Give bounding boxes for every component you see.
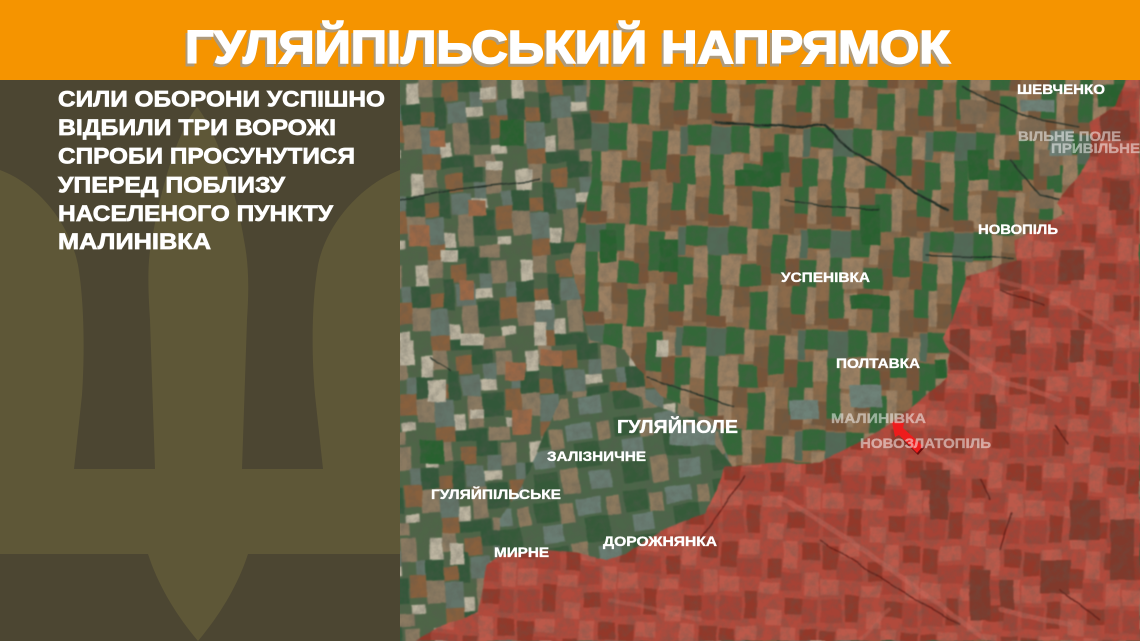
map labels: settlements: ГУЛЯЙПІЛЬСЬКЕ: [431, 487, 561, 502]
map labels: settlements: НОВОПІЛЬ: [978, 222, 1058, 237]
map: ground texture: [400, 80, 1140, 641]
arrow: attack direction: [892, 422, 925, 455]
title: ГУЛЯЙПІЛЬСЬКИЙ НАПРЯМОК: [185, 21, 951, 73]
text block: situation summary: ВІДБИЛИ ТРИ ВОРОЖІ: [58, 115, 336, 140]
header bar: [0, 0, 1140, 80]
map: hand-placed fields: [400, 85, 1132, 565]
left panel background: [0, 80, 400, 641]
map labels: settlements: ПОЛТАВКА: [836, 356, 920, 371]
text block: situation summary: СПРОБИ ПРОСУНУТИСЯ: [58, 144, 355, 168]
map labels: settlements: ГУЛЯЙПОЛЕ: [617, 416, 738, 437]
map labels: settlements: УСПЕНІВКА: [781, 270, 870, 285]
map: [395, 75, 1140, 641]
icon: trident emblem: [0, 107, 400, 641]
map labels: settlements: НОВОЗЛАТОПІЛЬ: [860, 436, 991, 451]
map: dark red fields: [920, 110, 1134, 620]
text block: situation summary: СИЛИ ОБОРОНИ УСПІШНО: [58, 86, 385, 112]
map labels: settlements: ДОРОЖНЯНКА: [603, 534, 717, 549]
map labels: settlements: [431, 82, 1140, 560]
map: ravines: [400, 87, 1079, 407]
map labels: settlements: ПРИВІЛЬНЕ: [1051, 141, 1140, 156]
map: central and eastern farmland: [570, 75, 1140, 480]
map labels: settlements: ВІЛЬНЕ ПОЛЕ: [1018, 129, 1121, 144]
map: Russian-held zone: [400, 80, 1140, 641]
text block: situation summary: НАСЕЛЕНОГО ПУНКТУ: [58, 201, 334, 226]
map labels: settlements: ЗАЛІЗНИЧНЕ: [547, 449, 646, 464]
map labels: settlements: МИРНЕ: [494, 545, 549, 560]
map: western farmland: [395, 75, 1140, 641]
text block: situation summary: УПЕРЕД ПОБЛИЗУ: [58, 172, 286, 198]
map labels: settlements: МАЛИНІВКА: [831, 411, 926, 426]
text block: situation summary: [58, 86, 385, 254]
map: southern farmland near Huliaipole: [500, 390, 735, 570]
map: lighter strips in occupied zone: [610, 280, 1130, 641]
text block: situation summary: МАЛИНІВКА: [58, 229, 211, 254]
map: ravines in occupied zone: [700, 290, 1100, 625]
map labels: settlements: ШЕВЧЕНКО: [1017, 82, 1105, 97]
